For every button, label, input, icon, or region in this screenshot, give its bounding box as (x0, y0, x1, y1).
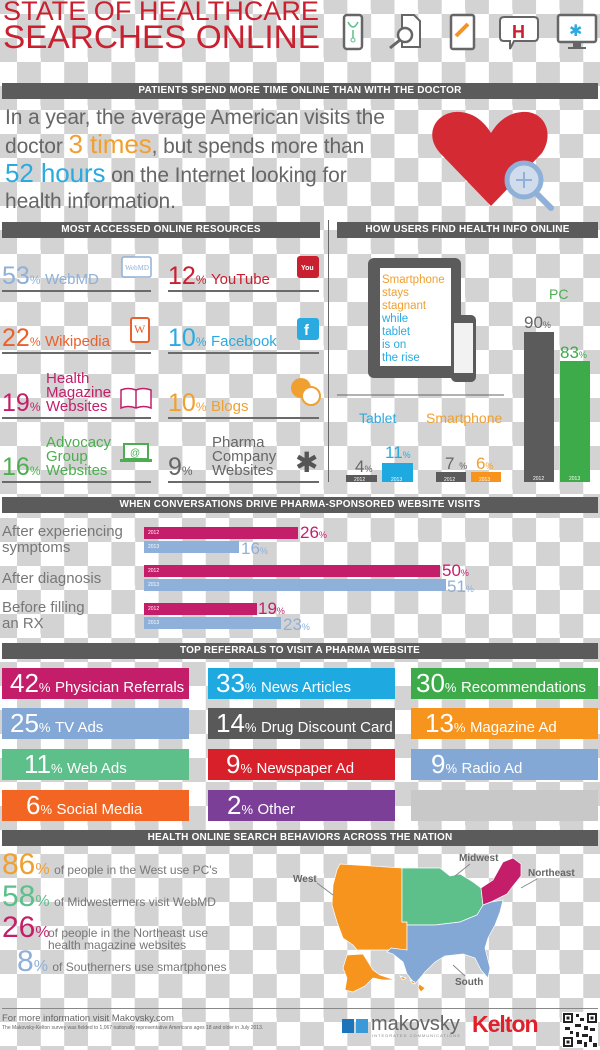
chart: conversations bars: 2013 (148, 620, 159, 626)
stat: west: 86% of people in the West use PC's (2, 848, 218, 881)
tablet and smartphone bars: 7 % (445, 454, 467, 473)
chart: how users find health info (337, 258, 590, 483)
row: after experiencing symptoms (2, 523, 123, 556)
tablet illustration: the rise (382, 352, 420, 364)
pc bars: 83% (560, 343, 587, 362)
tablet illustration: tablet (382, 326, 411, 338)
footer text: For more information visit Makovsky.com (2, 1013, 174, 1024)
tablet and smartphone bars: Smartphone (426, 410, 502, 426)
tablet and smartphone bars: 6% (476, 454, 493, 473)
tablet illustration: stagnant (382, 300, 427, 312)
tile: tv ads: 25% TV Ads (10, 708, 103, 738)
tile: tv ads (2, 708, 189, 739)
tile: radio ad: 9% Radio Ad (431, 749, 522, 779)
tile: social media: 6% Social Media (26, 790, 142, 820)
panel: most accessed resources: Websites (212, 462, 273, 479)
tile: magazine ad (411, 708, 598, 739)
row: before filling rx: Before filling (2, 599, 85, 616)
chart: conversations bars: 23% (283, 615, 310, 634)
intro text: 52 hours on the Internet looking for (5, 158, 347, 188)
icons row (342, 14, 598, 50)
map: us regions: Northeast (528, 868, 575, 879)
tile: social media (2, 790, 189, 821)
tablet and smartphone bars (346, 410, 502, 483)
icon: H speech bubble (500, 17, 538, 49)
header: most accessed: MOST ACCESSED ONLINE RESOURCES (61, 224, 261, 235)
resource icons: W (134, 322, 146, 336)
map: us regions: Midwest (459, 853, 499, 864)
chart: conversations bars: 50% (442, 561, 469, 580)
region: northeast (481, 858, 521, 905)
tile: news articles: 33% News Articles (216, 668, 351, 698)
header: when conversations drive: WHEN CONVERSATIONS DRIVE PHARMA-SPONSORED WEBSITE VISITS (119, 499, 481, 510)
intro text: health information. (5, 190, 176, 213)
resource icons: @ (130, 448, 140, 459)
tile: other: 2% Other (227, 790, 295, 820)
panel: regional stats: health magazine websites (48, 938, 186, 952)
item: advocacy: 16% (2, 453, 40, 481)
tablet illustration: Smartphone (382, 274, 445, 286)
title (3, 0, 320, 55)
tablet illustration: is on (382, 339, 406, 351)
title: SEARCHES ONLINE (3, 19, 320, 55)
icon: monitor medical: ✱ (569, 21, 582, 40)
header: top referrals: TOP REFERRALS TO VISIT A PHARMA WEBSITE (180, 645, 420, 656)
resource icons: f (304, 322, 310, 339)
row: after experiencing symptoms: symptoms (2, 539, 70, 556)
header: health online search behaviors (2, 830, 598, 846)
footer text (2, 1013, 263, 1031)
panel: most accessed resources: Group (46, 448, 88, 465)
stat: south: 8% of Southerners use smartphones (17, 945, 226, 978)
item: youtube: 12% YouTube (168, 262, 270, 290)
panel: most accessed resources: Magazine (46, 384, 111, 401)
chart: conversations bars: 2013 (148, 544, 159, 550)
region: alaska (343, 954, 395, 992)
panel: regional stats (2, 848, 226, 978)
tablet and smartphone bars: 11% (385, 443, 411, 462)
footer text: The Makovsky-Kelton survey was fielded to 1,067 nationally representative Americans ages 18 and older in July 2013. (2, 1025, 263, 1031)
header: most accessed (2, 222, 320, 238)
tile: newspaper ad (208, 749, 395, 780)
icon: heart with magnifier (432, 112, 554, 211)
header: patients spend more time (2, 83, 598, 99)
stat: midwest: 58% of Midwesterners visit WebMD (2, 880, 216, 913)
logo: kelton: Kelton (472, 1011, 538, 1037)
icon: magnifier doc (390, 15, 420, 48)
tablet and smartphone bars: 2012 (354, 477, 365, 483)
pc bars: 2013 (569, 476, 580, 482)
tablet and smartphone bars: 2012 (444, 477, 455, 483)
logo: makovsky: makovsky (371, 1013, 460, 1035)
icon: H speech bubble: H (512, 22, 525, 42)
chart: conversations bars: 2012 (148, 568, 159, 574)
tile: web ads: 11% Web Ads (24, 749, 127, 779)
chart: conversations bars: 51% (447, 577, 474, 596)
header: when conversations drive (2, 497, 598, 513)
tile: drug discount card: 14% Drug Discount Card (216, 708, 393, 738)
item: facebook: 10% Facebook (168, 324, 277, 352)
row: after experiencing symptoms: After experiencing (2, 523, 123, 540)
row: before filling rx (2, 599, 85, 632)
header: patients spend more time: PATIENTS SPEND MORE TIME ONLINE THAN WITH THE DOCTOR (138, 85, 462, 96)
chart: conversations bars: 2012 (148, 530, 159, 536)
chart: conversations bars: 26% (300, 523, 327, 542)
chart: conversations bars: 2013 (148, 582, 159, 588)
tile: radio ad (411, 749, 598, 780)
intro text (5, 106, 385, 213)
pc bars: PC (549, 286, 568, 302)
tablet and smartphone bars: 2013 (479, 477, 490, 483)
intro text: In a year, the average American visits the (5, 106, 385, 129)
row: before filling rx: an RX (2, 615, 44, 632)
item: pharma: 9% (168, 453, 193, 481)
chart: conversations bars (2, 523, 474, 634)
resource icons (120, 256, 321, 479)
region: west (332, 864, 407, 950)
region: south (387, 900, 503, 984)
item: blogs: 10% Blogs (168, 389, 248, 417)
map: us regions (293, 853, 575, 992)
tile: newspaper ad: 9% Newspaper Ad (226, 749, 354, 779)
icon: phone stethoscope (344, 15, 362, 49)
row: after diagnosis: After diagnosis (2, 570, 101, 587)
logo: makovsky (342, 1013, 461, 1038)
tile: other (208, 790, 395, 821)
panel: most accessed resources: Websites (46, 462, 107, 479)
panel: most accessed resources: Pharma (212, 434, 265, 451)
chart: conversations bars: 16% (241, 539, 268, 558)
chart: conversations bars: 19% (258, 599, 285, 618)
panel: most accessed resources: Company (212, 448, 276, 465)
resource icons: You (301, 265, 314, 272)
panel: most accessed resources: Websites (46, 398, 107, 415)
tile: news articles (208, 668, 395, 699)
panel: most accessed resources (2, 256, 321, 483)
item: health magazine: 19% (2, 389, 40, 417)
tile: physician referrals: 42% Physician Referrals (10, 668, 184, 698)
tablet illustration (368, 258, 476, 382)
item: wikipedia: 22% Wikipedia (2, 324, 110, 352)
region: hawaii (400, 976, 425, 992)
tablet and smartphone bars: 2013 (391, 477, 402, 483)
tablet illustration: stays (382, 287, 409, 299)
qr code (562, 1012, 598, 1048)
logo: makovsky: INTEGRATED COMMUNICATIONS (372, 1033, 461, 1038)
panel: most accessed resources: Health (46, 370, 89, 387)
tile: web ads (2, 749, 189, 780)
map: us regions: West (293, 874, 317, 885)
panel: regional stats: of people in the Northeast use (48, 926, 208, 940)
tile: recommendations: 30% Recommendations (416, 668, 586, 698)
pc bars (524, 286, 590, 482)
tablet and smartphone bars: Tablet (359, 410, 396, 426)
icon: monitor medical (558, 15, 596, 49)
pc bars: 90% (524, 313, 551, 332)
region: midwest (402, 868, 483, 925)
panel: most accessed resources: Advocacy (46, 434, 111, 451)
header: health online search behaviors: HEALTH ONLINE SEARCH BEHAVIORS ACROSS THE NATION (148, 832, 452, 843)
chart: conversations bars: 2012 (148, 606, 159, 612)
header: top referrals (2, 643, 598, 659)
intro text: doctor 3 times, but spends more than (5, 129, 364, 159)
map: us regions: South (455, 977, 483, 988)
item: webmd: 53% WebMD (2, 262, 99, 290)
panel: referral tiles (2, 668, 598, 821)
header: how users find: HOW USERS FIND HEALTH INFO ONLINE (365, 224, 570, 235)
header: how users find (337, 222, 598, 238)
resource icons: WebMD (125, 264, 149, 272)
stat: northeast: 26% (2, 911, 50, 944)
resource icons: ✱ (295, 446, 318, 479)
tablet and smartphone bars: 4% (355, 457, 372, 476)
pc bars: 2012 (533, 476, 544, 482)
tile: magazine ad: 13% Magazine Ad (425, 708, 557, 738)
tablet illustration: while (381, 313, 408, 325)
icon: tablet pills (451, 15, 474, 49)
